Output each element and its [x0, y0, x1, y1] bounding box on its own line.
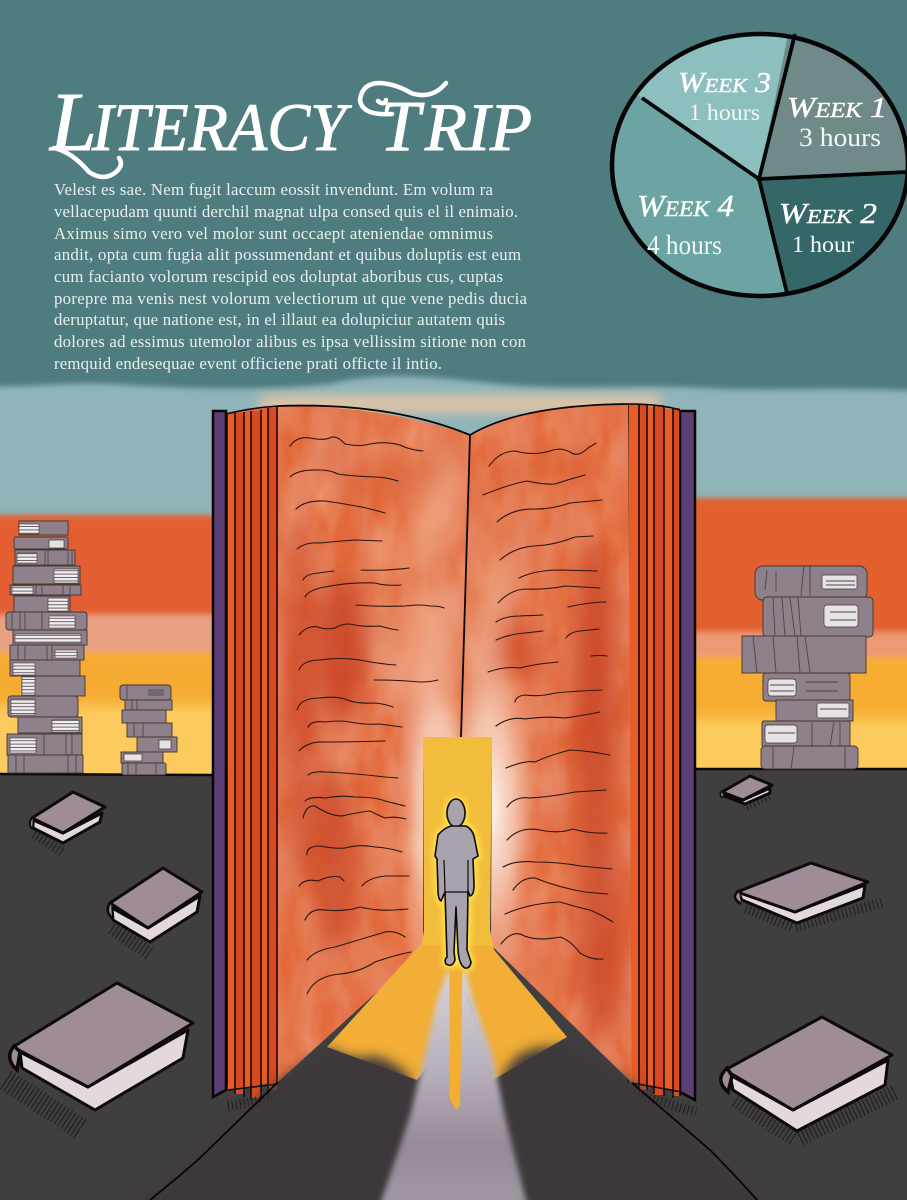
label: week 1 — [787, 92, 887, 152]
pie slice: week 1 — [762, 38, 906, 177]
right purple cover — [680, 411, 695, 1100]
body paragraph: cum facianto volorum rescipid eos doluptat aboribus cus, cuptas — [54, 267, 503, 286]
body paragraph — [54, 180, 528, 373]
floor book, left medium — [108, 868, 202, 954]
title: T — [380, 86, 425, 166]
left floor shadow — [130, 1048, 412, 1200]
left page edges — [226, 406, 280, 1106]
floor book, left large — [6, 983, 193, 1130]
floor book, right small — [720, 776, 772, 808]
right page text lines — [483, 443, 613, 959]
left tall book stack — [6, 521, 87, 773]
right floor shadow — [500, 1047, 770, 1200]
ground — [0, 769, 907, 1200]
label: week 2: WEEK 2 — [779, 199, 877, 230]
body paragraph: dolores ad essimus utemolor alibus es ipsa vellissim sitione non con — [54, 332, 527, 351]
giant open book — [213, 400, 696, 1112]
right page edges — [628, 404, 696, 1112]
title: ITERACY — [91, 89, 352, 165]
label: week 1: 3 hours — [799, 123, 881, 152]
body paragraph: vellacepudam quunti derchil magnat ulpa consed quis el il enimaio. — [54, 202, 518, 221]
doorway — [420, 737, 495, 955]
body paragraph: porepre ma venis nest volorum velectiorum ut que vene pedis ducia — [54, 289, 528, 308]
label: week 2: 1 hour — [792, 232, 854, 257]
light spilling on floor — [327, 945, 567, 1080]
pie outline — [612, 34, 907, 296]
body paragraph: deruptatur, que natione est, in el illaut ea dolupiciur autatem quis — [54, 310, 505, 329]
pie slice: week 4 — [614, 95, 785, 294]
sky background — [0, 0, 907, 795]
label: week 1: WEEK 1 — [787, 92, 887, 124]
label: week 3: 1 hours — [689, 100, 760, 125]
label: week 4: WEEK 4 — [637, 188, 734, 223]
label: week 2 — [779, 199, 877, 257]
teal header band — [0, 0, 907, 392]
label: week 3 — [678, 68, 771, 125]
right page surface — [462, 404, 632, 1083]
perspective floor lines — [150, 1082, 757, 1200]
glowing path on floor — [380, 972, 527, 1200]
pie spokes — [642, 34, 907, 293]
floor book, right medium — [735, 863, 884, 928]
yellow centre streak — [449, 940, 463, 1110]
left page text lines — [290, 437, 444, 994]
title: RIP — [424, 89, 532, 165]
body paragraph: Velest es sae. Nem fugit laccum eossit invendunt. Em volum ra — [54, 180, 494, 199]
pie slice: week 3 — [638, 36, 788, 176]
label: week 3: WEEK 3 — [678, 68, 771, 99]
title: L — [49, 76, 97, 169]
pie chart: reading hours by week — [610, 32, 907, 298]
left small book stack — [120, 685, 177, 775]
floor book, left small — [30, 792, 105, 852]
right book stack — [742, 565, 873, 769]
body paragraph: andit, opta cum fugia alit possumendant et quibus doluptis est eum — [54, 245, 521, 264]
person walking into the book — [435, 796, 478, 968]
label: week 4 — [637, 188, 734, 260]
body paragraph: remquid endesequae event officiene prati officte il intio. — [54, 354, 442, 373]
left purple cover — [213, 411, 226, 1097]
floor book, right large — [721, 1017, 896, 1140]
label: week 4: 4 hours — [647, 230, 722, 260]
title — [49, 76, 532, 177]
top edges and spine — [278, 404, 628, 737]
pie slice: week 2 — [762, 174, 906, 292]
left page surface — [278, 406, 470, 1082]
body paragraph: Aximus simo vero vel molor sunt occaept ateniendae omnimus — [54, 224, 493, 243]
